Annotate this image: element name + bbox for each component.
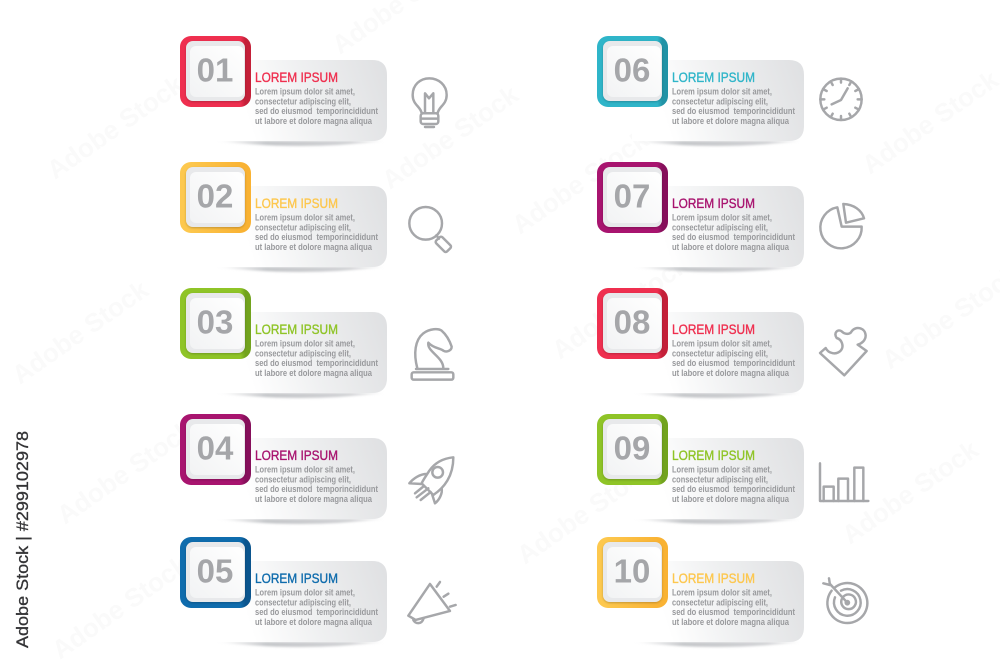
panel shadow [216, 519, 384, 524]
number badge: 07 [614, 178, 650, 214]
number badge: 05 [197, 552, 233, 590]
body text [255, 338, 378, 378]
body text: sed do eiusmod temporincididunt [672, 483, 795, 494]
heading: LOREM IPSUM [672, 70, 755, 85]
panel shadow [633, 267, 801, 272]
body text: Lorem ipsum dolor sit amet, [255, 464, 355, 474]
background watermark: Adobe Stock [41, 69, 189, 185]
panel shadow [216, 267, 384, 272]
body text: ut labore et dolore magna aliqua [255, 616, 373, 627]
body text: sed do eiusmod temporincididunt [255, 105, 378, 116]
body text: consectetur adipiscing elit, [255, 222, 351, 232]
number badge [180, 288, 251, 359]
body text [672, 464, 795, 504]
number badge [180, 162, 251, 233]
number badge: 09 [614, 430, 650, 466]
heading: LOREM IPSUM [255, 322, 338, 337]
body text: ut labore et dolore magna aliqua [255, 241, 373, 252]
number badge [180, 537, 251, 608]
number badge [180, 414, 251, 485]
number badge: 06 [614, 52, 650, 88]
number badge [597, 162, 668, 233]
text panel [215, 312, 387, 393]
body text: consectetur adipiscing elit, [255, 96, 351, 106]
icon: bar chart [820, 463, 868, 501]
body text: ut labore et dolore magna aliqua [255, 493, 373, 504]
heading: LOREM IPSUM [672, 322, 755, 337]
card 06 [597, 36, 804, 146]
card 03 [180, 288, 387, 398]
icon: chess knight [412, 329, 453, 380]
panel shadow [633, 393, 801, 398]
heading: LOREM IPSUM [255, 448, 338, 463]
body text [255, 212, 378, 252]
background watermark: Adobe Stock [856, 64, 1000, 180]
heading: LOREM IPSUM [672, 448, 755, 463]
body text: Lorem ipsum dolor sit amet, [672, 586, 772, 598]
card 04 [180, 414, 387, 524]
body text: Lorem ipsum dolor sit amet, [255, 212, 355, 222]
body text [255, 464, 378, 504]
background watermark: Adobe Stock [46, 549, 194, 665]
number badge: 04 [197, 430, 234, 466]
icon: megaphone [408, 582, 456, 623]
heading: LOREM IPSUM [255, 571, 338, 586]
icon: clock [820, 79, 862, 120]
text panel [632, 312, 804, 393]
body text [255, 586, 378, 627]
text panel [632, 186, 804, 267]
heading: LOREM IPSUM [672, 196, 755, 211]
number badge [597, 288, 668, 359]
body text: Lorem ipsum dolor sit amet, [255, 338, 355, 348]
card 02 [180, 162, 387, 272]
text panel [215, 186, 387, 267]
number badge [597, 537, 668, 608]
text panel [632, 60, 804, 141]
panel shadow [633, 519, 801, 524]
body text: consectetur adipiscing elit, [672, 348, 768, 358]
body text: sed do eiusmod temporincididunt [255, 231, 378, 242]
body text [672, 86, 795, 126]
body text: ut labore et dolore magna aliqua [255, 115, 373, 126]
body text: sed do eiusmod temporincididunt [255, 357, 378, 368]
body text: consectetur adipiscing elit, [672, 222, 768, 232]
panel shadow [216, 642, 384, 647]
body text: consectetur adipiscing elit, [255, 596, 351, 608]
body text: consectetur adipiscing elit, [672, 474, 768, 484]
body text: sed do eiusmod temporincididunt [255, 483, 378, 494]
heading: LOREM IPSUM [255, 70, 338, 85]
body text: Lorem ipsum dolor sit amet, [255, 86, 355, 96]
number badge [597, 414, 668, 485]
background watermark: Adobe Stock [546, 249, 694, 365]
card 10 [597, 537, 804, 647]
body text: consectetur adipiscing elit, [255, 474, 351, 484]
body text: sed do eiusmod temporincididunt [672, 606, 795, 617]
body text: ut labore et dolore magna aliqua [672, 241, 790, 252]
body text: Lorem ipsum dolor sit amet, [255, 586, 355, 598]
body text: consectetur adipiscing elit, [672, 96, 768, 106]
panel shadow [216, 141, 384, 146]
number badge [180, 36, 251, 107]
number badge: 08 [614, 304, 650, 340]
card 09 [597, 414, 804, 524]
icon: puzzle piece [820, 328, 867, 375]
text panel [632, 438, 804, 519]
body text: ut labore et dolore magna aliqua [672, 616, 790, 627]
icon: rocket [409, 457, 453, 503]
icon: target with arrow [823, 578, 867, 623]
text panel [215, 561, 387, 642]
text panel [215, 438, 387, 519]
background watermark: Adobe Stock [506, 124, 654, 240]
text panel [215, 60, 387, 141]
text panel [632, 561, 804, 642]
body text: sed do eiusmod temporincididunt [672, 231, 795, 242]
background watermark: Adobe Stock [6, 274, 154, 390]
body text: Lorem ipsum dolor sit amet, [672, 86, 772, 96]
body text: ut labore et dolore magna aliqua [672, 493, 790, 504]
number badge: 03 [197, 304, 233, 340]
body text: Lorem ipsum dolor sit amet, [672, 338, 772, 348]
card 05 [180, 537, 387, 647]
card 07 [597, 162, 804, 272]
body text: ut labore et dolore magna aliqua [672, 115, 790, 126]
heading: LOREM IPSUM [255, 196, 338, 211]
icon: light bulb [413, 78, 447, 127]
panel shadow [633, 141, 801, 146]
body text: Lorem ipsum dolor sit amet, [672, 212, 772, 222]
background watermark: Adobe Stock [511, 454, 659, 570]
number badge [597, 36, 668, 107]
body text [255, 86, 378, 126]
background watermark: Adobe Stock [836, 434, 984, 550]
body text: sed do eiusmod temporincididunt [672, 357, 795, 368]
body text [672, 586, 795, 627]
body text: ut labore et dolore magna aliqua [255, 367, 373, 378]
background watermark: Adobe Stock [376, 79, 524, 195]
card 08 [597, 288, 804, 398]
body text: sed do eiusmod temporincididunt [255, 606, 378, 617]
body text: consectetur adipiscing elit, [255, 348, 351, 358]
number badge: 02 [197, 178, 233, 214]
panel shadow [633, 642, 801, 647]
icon: pie chart [820, 204, 864, 248]
panel shadow [216, 393, 384, 398]
body text: Lorem ipsum dolor sit amet, [672, 464, 772, 474]
icon: magnifying glass [409, 207, 452, 253]
card 01 [180, 36, 387, 146]
body text [672, 338, 795, 378]
number badge: 10 [614, 552, 650, 590]
heading: LOREM IPSUM [672, 571, 755, 586]
body text: ut labore et dolore magna aliqua [672, 367, 790, 378]
body text: consectetur adipiscing elit, [672, 596, 768, 608]
background watermark: Adobe Stock [51, 414, 199, 530]
body text [672, 212, 795, 252]
body text: sed do eiusmod temporincididunt [672, 105, 795, 116]
stock credit: Adobe Stock | #299102978 [13, 431, 32, 648]
number badge: 01 [197, 52, 233, 88]
